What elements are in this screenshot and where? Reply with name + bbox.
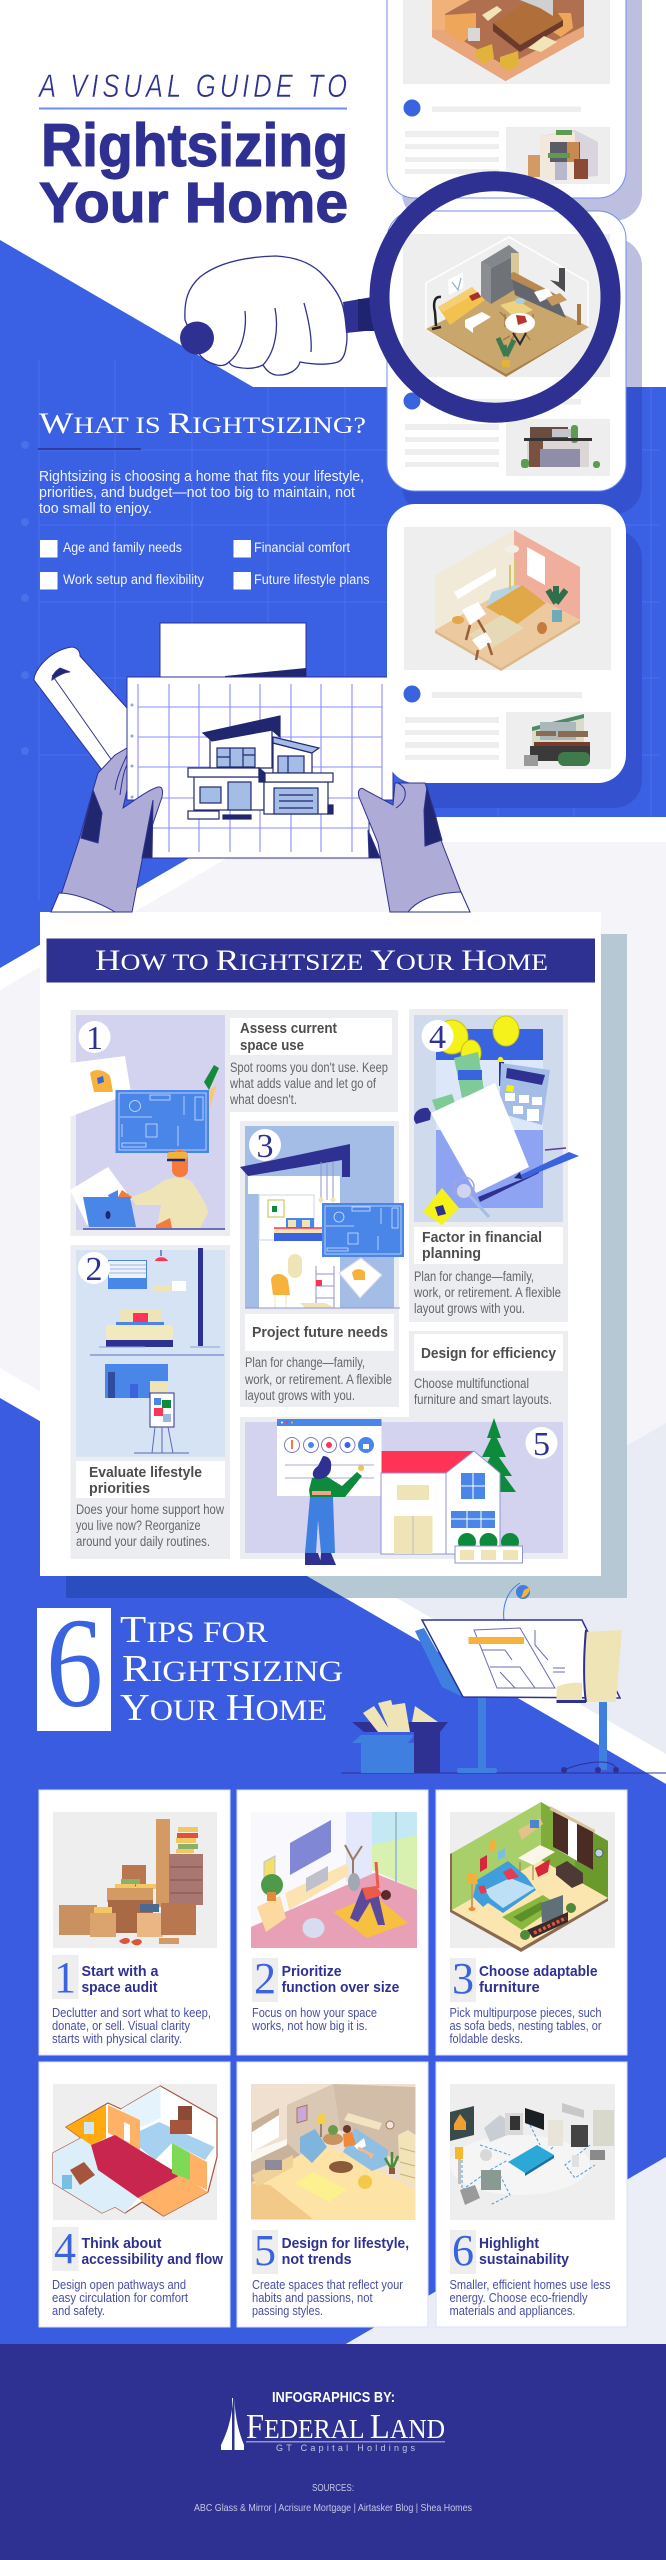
listing card: bottom bedroom — [387, 504, 626, 783]
number badge 3: 3 — [256, 1128, 274, 1165]
rolled plan — [34, 647, 127, 770]
step 4: factor in financial planning — [409, 1009, 579, 1322]
section: what is rightsizing — [38, 407, 370, 590]
tip text: works, not how big it is. — [251, 2018, 368, 2033]
tip text: as sofa beds, nesting tables, or — [450, 2018, 602, 2033]
title block — [37, 69, 348, 235]
blueprint sheet — [127, 677, 393, 858]
paragraph — [39, 469, 364, 517]
listing card: top bedroom — [387, 0, 626, 198]
number badge 5: 5 — [533, 1426, 550, 1463]
tip title: not trends — [282, 2251, 352, 2268]
tip text: Focus on how your space — [252, 2005, 377, 2020]
tip text: donate, or sell. Visual clarity — [52, 2018, 190, 2033]
number badge 5 — [526, 1426, 558, 1463]
step text: furniture and smart layouts. — [414, 1392, 552, 1407]
numeral 6: 6 — [452, 2226, 474, 2275]
checklist: Age and family needs — [63, 540, 182, 555]
tip text — [450, 2005, 602, 2046]
magnifying glass — [180, 181, 610, 413]
tip title — [82, 2235, 223, 2268]
paragraph: Rightsizing is choosing a home that fits your lifestyle, — [39, 469, 364, 485]
big numeral: 6 — [46, 1592, 103, 1734]
number badge 4 — [422, 1019, 454, 1056]
step text: layout grows with you. — [414, 1301, 525, 1316]
step text: work, or retirement. A flexible — [413, 1285, 561, 1300]
tip title — [82, 1963, 159, 1996]
step title — [245, 1314, 394, 1351]
illustration: green isometric living room — [450, 1802, 608, 1952]
illustration: bedroom and planning board — [90, 1248, 224, 1453]
step text — [413, 1269, 561, 1316]
step 5: design for efficiency — [240, 1331, 568, 1565]
numeral 2: 2 — [254, 1954, 276, 2003]
tip text: passing styles. — [252, 2303, 323, 2318]
step text — [229, 1060, 388, 1107]
title kicker: A VISUAL GUIDE TO — [37, 69, 347, 105]
tip title: Think about — [82, 2235, 162, 2252]
tip text: Create spaces that reflect your — [252, 2277, 404, 2292]
tip text: starts with physical clarity. — [52, 2031, 182, 2046]
step text — [76, 1502, 224, 1549]
section: six tips header — [37, 1583, 666, 1773]
tip text — [52, 2005, 211, 2046]
tip card 1 — [39, 1790, 230, 2055]
footer — [0, 2344, 666, 2560]
heading underline — [38, 448, 141, 450]
step text: Plan for change—family, — [414, 1269, 534, 1284]
tip text — [252, 2277, 404, 2318]
tip text: habits and passions, not — [252, 2290, 373, 2305]
logo: Federal Land: GT Capital Holdings — [276, 2443, 416, 2453]
tip text: easy circulation for comfort — [52, 2290, 188, 2305]
tip title: Prioritize — [282, 1963, 342, 1980]
tip card 2 — [237, 1790, 428, 2055]
step 3: project future needs — [240, 1121, 404, 1407]
illustration: orange isometric bedroom — [432, 0, 584, 81]
heading bar — [46, 938, 595, 982]
tip title: function over size — [282, 1979, 399, 1996]
sources label: SOURCES: — [312, 2483, 354, 2494]
step text: Does your home support how — [76, 1502, 224, 1517]
card shadow — [66, 934, 627, 1598]
numeral 5: 5 — [254, 2226, 276, 2275]
number badge 4: 4 — [429, 1019, 446, 1056]
illustration: budget calculator and coins — [414, 1016, 579, 1225]
step text: work, or retirement. A flexible — [244, 1372, 392, 1387]
step text: Choose multifunctional — [414, 1376, 529, 1391]
number badge 1: 1 — [86, 1020, 103, 1057]
tip card 5 — [237, 2062, 428, 2327]
step title: Design for efficiency — [421, 1345, 557, 1362]
step text: around your daily routines. — [76, 1534, 210, 1549]
magnifier lens glass — [385, 187, 605, 407]
right hand — [358, 783, 470, 912]
heading: RIGHTSIZING — [122, 1648, 343, 1690]
tip card 3 — [436, 1790, 627, 2055]
illustration: cozy lounge with sofa and dog — [251, 2084, 416, 2220]
illustration: home interior and floor plan — [240, 1144, 404, 1308]
tip text — [52, 2277, 188, 2318]
illustration: drafting table, chair and box — [341, 1583, 666, 1773]
step title: priorities — [89, 1480, 150, 1497]
sources list: ABC Glass & Mirror | Acrisure Mortgage | Airtasker Blog | Shea Homes — [194, 2502, 472, 2514]
tip title: furniture — [479, 1979, 540, 1996]
tip text — [251, 2005, 377, 2033]
main title line 2: Your Home — [39, 171, 348, 235]
step title: space use — [240, 1037, 304, 1054]
illustration: isometric home floor plan — [53, 2086, 217, 2216]
step text: what adds value and let go of — [229, 1076, 376, 1091]
heading: YOUR HOME — [120, 1687, 327, 1729]
illustration: thumbnail tan house — [528, 130, 598, 180]
tip text: Declutter and sort what to keep, — [52, 2005, 211, 2020]
step title — [414, 1334, 563, 1371]
tip title: space audit — [82, 1979, 158, 1996]
left hand — [51, 748, 163, 912]
title rule — [39, 108, 347, 110]
step text: what doesn't. — [229, 1092, 297, 1107]
tip text: and safety. — [52, 2303, 105, 2318]
listing dot — [404, 392, 420, 410]
main title line 1: Rightsizing — [41, 112, 348, 179]
tip title: Highlight — [479, 2235, 539, 2252]
illustration: yoga in living room — [251, 1812, 417, 1948]
tip title: Choose adaptable — [479, 1963, 598, 1980]
step title — [414, 1227, 563, 1264]
section: how to rightsize — [40, 912, 627, 1598]
tip text: Pick multipurpose pieces, such — [450, 2005, 602, 2020]
illustration: thumbnail modern brown house — [521, 425, 600, 468]
tip title: Design for lifestyle, — [282, 2235, 409, 2252]
step title: Project future needs — [252, 1324, 388, 1341]
tip text — [450, 2277, 611, 2318]
hand gripping magnifier — [180, 256, 347, 375]
gloved hands — [51, 748, 470, 912]
heading — [120, 1609, 343, 1729]
step text: Plan for change—family, — [245, 1355, 365, 1370]
illustration: smart home controls and house — [277, 1418, 522, 1565]
listing dot — [404, 686, 420, 702]
step text — [244, 1355, 392, 1403]
tip title: accessibility and flow — [82, 2251, 223, 2268]
tip text: materials and appliances. — [450, 2303, 576, 2318]
numeral 4: 4 — [54, 2224, 76, 2273]
phone card shadows — [402, 0, 642, 808]
tip card 6 — [436, 2062, 627, 2327]
illustration: moving boxes and drawers — [59, 1819, 203, 1945]
number badge 3 — [249, 1128, 281, 1165]
tip title — [282, 2235, 409, 2268]
heading: TIPS FOR — [120, 1609, 268, 1651]
step text — [414, 1376, 552, 1407]
tip text: Design open pathways and — [52, 2277, 186, 2292]
tip title: Start with a — [82, 1963, 159, 1980]
paragraph: priorities, and budget—not too big to maintain, not — [39, 485, 355, 501]
house drawing on blueprint — [188, 716, 333, 819]
step text: layout grows with you. — [245, 1388, 355, 1403]
illustration: isometric pink bedroom — [435, 530, 580, 671]
tip text: Smaller, efficient homes use less — [450, 2277, 611, 2292]
number badge 2: 2 — [86, 1251, 102, 1288]
credit label: INFOGRAPHICS BY: — [272, 2390, 395, 2406]
step title: Assess current — [240, 1020, 337, 1037]
checklist — [40, 540, 370, 590]
step title — [230, 1018, 392, 1055]
logo: Federal Land: FEDERAL LAND — [246, 2407, 445, 2446]
logo: Federal Land — [221, 2398, 445, 2453]
tip title — [479, 1963, 598, 1996]
number badge 1 — [78, 1020, 110, 1057]
listing dot — [404, 100, 420, 116]
tip text: energy. Choose eco-friendly — [450, 2290, 588, 2305]
number badge 2 — [78, 1251, 110, 1288]
step text: Spot rooms you don't use. Keep — [230, 1060, 388, 1075]
illustration: blueprint sheets — [34, 623, 393, 858]
back sheet — [160, 623, 306, 679]
tip card 4 — [39, 2062, 230, 2327]
numeral 1: 1 — [54, 1953, 76, 2002]
numeral 3: 3 — [452, 1954, 474, 2003]
step title: Factor in financial — [422, 1229, 542, 1246]
tip title — [479, 2235, 570, 2268]
heading bar: HOW TO RIGHTSIZE YOUR HOME — [95, 944, 548, 977]
step title: Evaluate lifestyle — [89, 1464, 202, 1481]
white panel — [40, 912, 601, 1576]
illustration: person reviewing floor plan — [70, 1056, 225, 1229]
checklist: Financial comfort — [254, 540, 350, 555]
tip text: foldable desks. — [450, 2031, 523, 2046]
tip title: sustainability — [479, 2251, 570, 2268]
step text: you live now? Reorganize — [76, 1518, 200, 1533]
illustration: connected efficient appliances — [450, 2103, 614, 2205]
step 1: assess current space use — [70, 1010, 398, 1236]
step 2: evaluate lifestyle priorities — [70, 1245, 230, 1559]
magnifier handle — [343, 297, 375, 333]
checklist: Future lifestyle plans — [254, 572, 370, 587]
illustration: isometric kitchen and living room — [426, 237, 589, 377]
magnifier ring — [380, 181, 610, 413]
checklist: Work setup and flexibility — [63, 572, 204, 587]
heading: W HAT IS RIGHTSIZING? — [39, 407, 366, 440]
listing card: highlighted kitchen — [387, 211, 626, 491]
illustration: thumbnail green house — [524, 714, 590, 766]
step title — [76, 1461, 225, 1498]
paragraph: too small to enjoy. — [39, 501, 152, 517]
step title: planning — [422, 1245, 481, 1262]
tip title — [282, 1963, 399, 1996]
